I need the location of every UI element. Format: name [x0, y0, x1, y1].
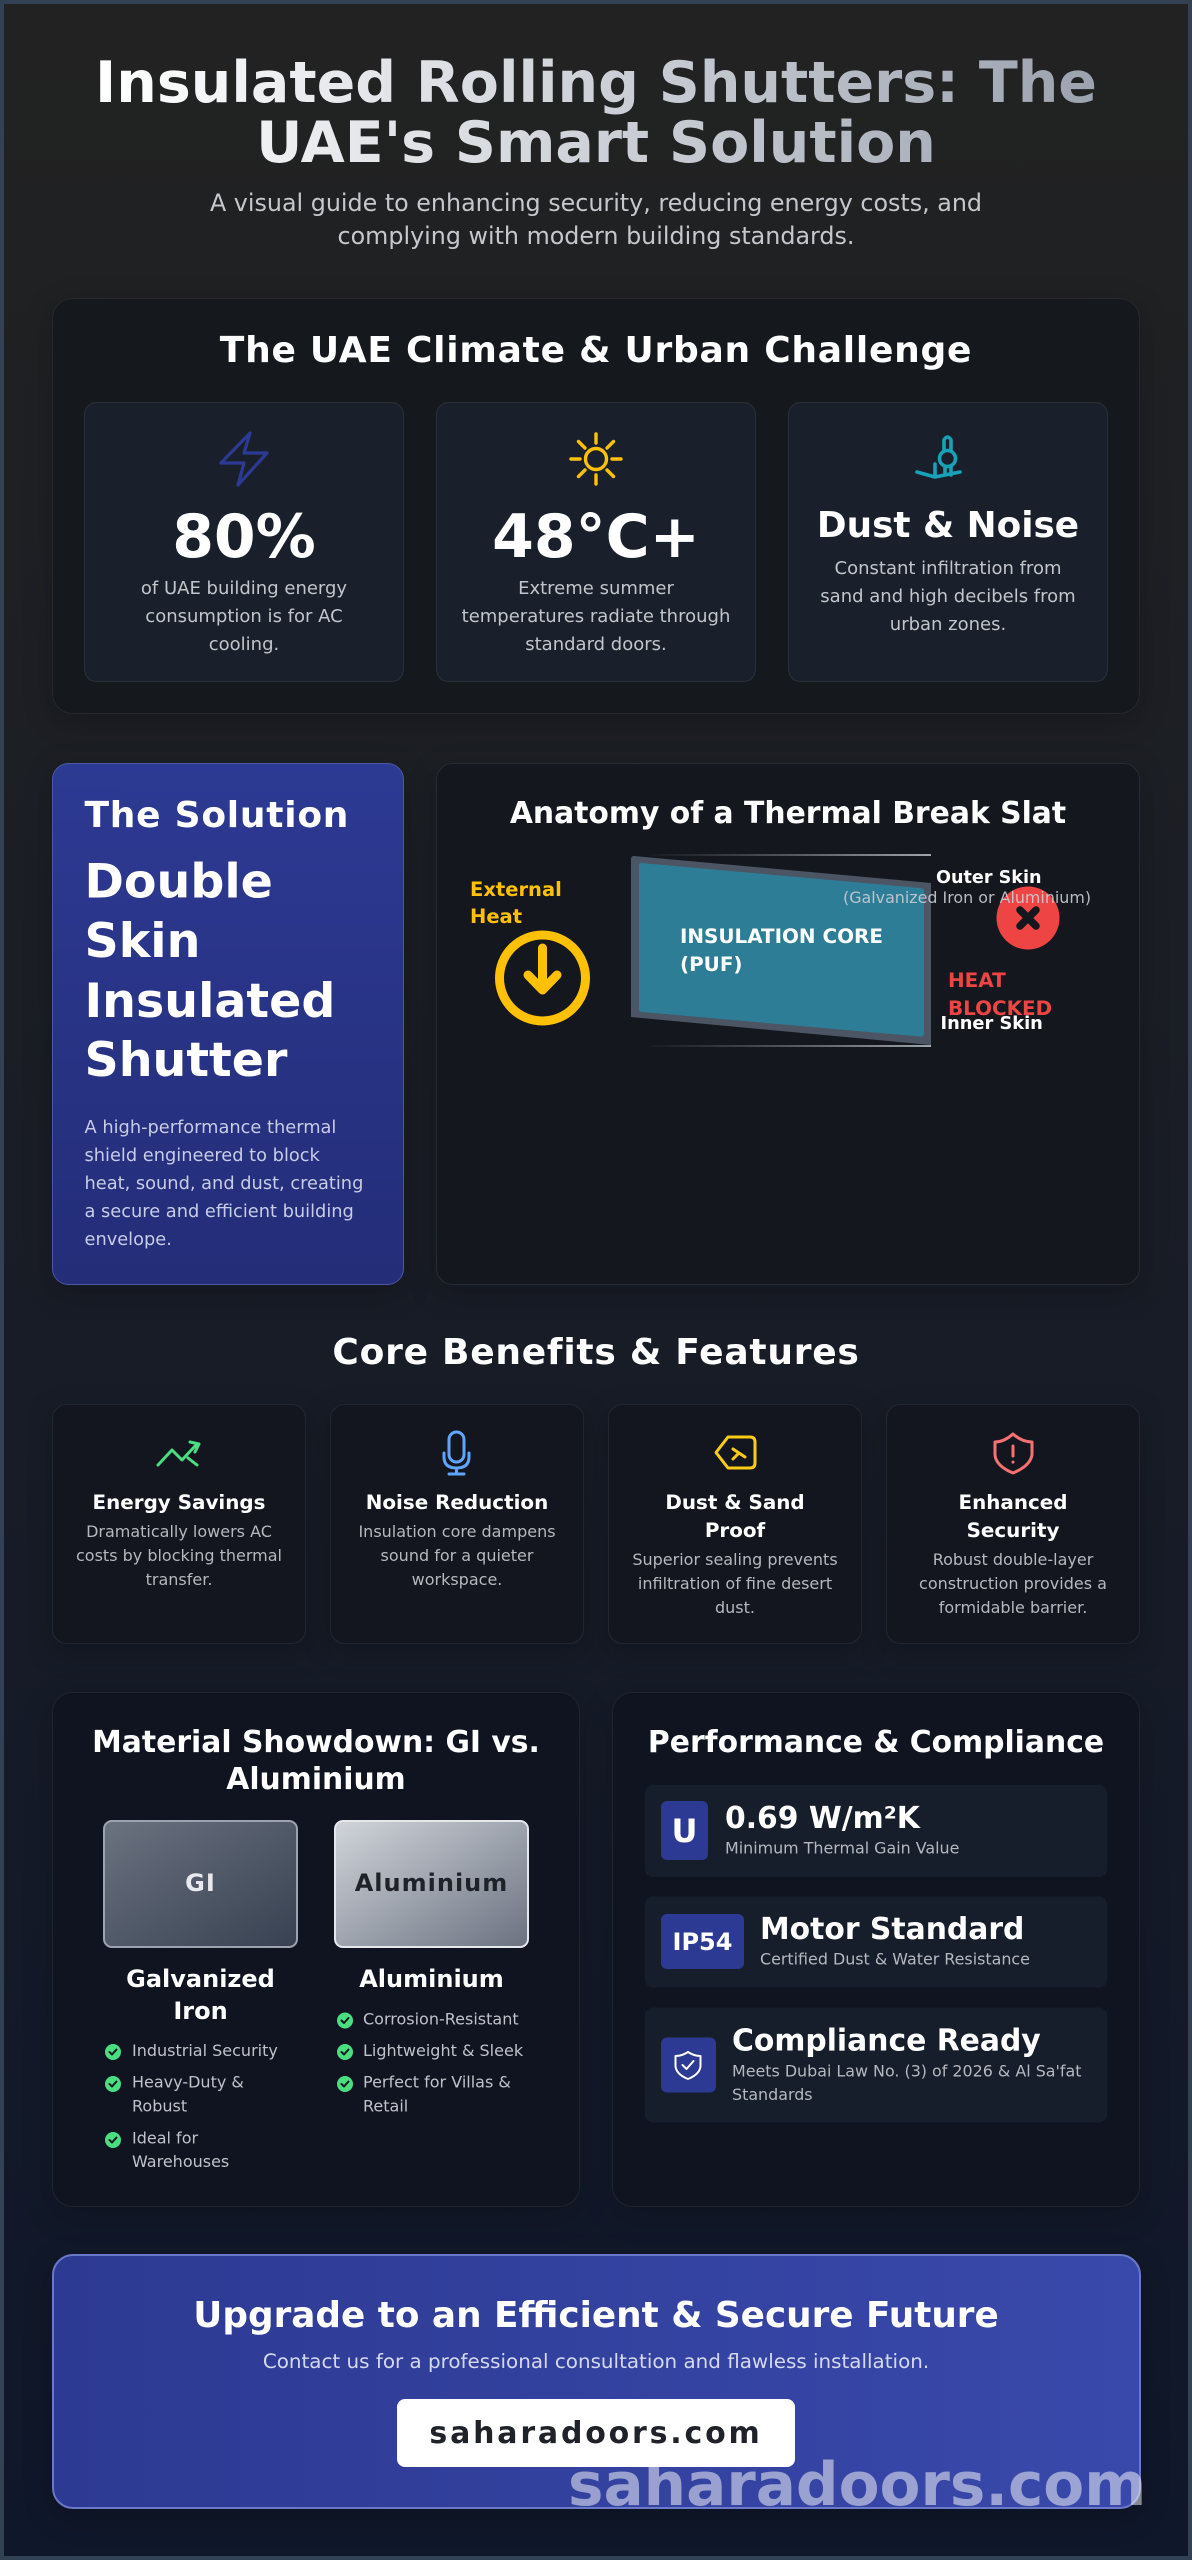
- benefit text: Robust double-layer: [933, 1550, 1094, 1569]
- benefit text: [358, 1522, 556, 1589]
- column: aluminium: Aluminium: [359, 1965, 504, 1993]
- solution name: Skin: [84, 914, 200, 969]
- title: Insulated Rolling Shutters: The: [95, 50, 1097, 116]
- label: external heat: External: [470, 878, 562, 901]
- solution name: Double: [84, 854, 273, 910]
- card: energy stat: [84, 402, 404, 682]
- subheading: call to action: Contact us for a professional consultation and flawless installation.: [263, 2350, 929, 2373]
- solution description: [84, 1117, 363, 1250]
- heading: material showdown: [92, 1725, 540, 1797]
- stat: 80%: 80%: [172, 502, 316, 572]
- benefit title: Dust & Sand: [665, 1491, 805, 1514]
- benefit text: sound for a quieter: [381, 1546, 534, 1565]
- solution description: envelope.: [84, 1229, 172, 1250]
- benefit text: [919, 1550, 1107, 1617]
- swatch: Aluminium: [335, 1821, 528, 1947]
- label: outer skin: Outer Skin: [936, 868, 1042, 888]
- benefit title: Noise Reduction: [366, 1491, 548, 1514]
- checklist: aluminium: Lightweight & Sleek: [363, 2041, 524, 2060]
- row: compliance ready: Compliance Ready: [732, 2024, 1041, 2058]
- icon: microphone: [444, 1432, 469, 1474]
- row: U-value: Minimum Thermal Gain Value: [725, 1838, 959, 1858]
- label: inner skin: Inner Skin: [940, 1013, 1043, 1034]
- description: [141, 578, 347, 655]
- panel: climate challenge: [52, 298, 1140, 714]
- title: [95, 50, 1097, 176]
- heading: material showdown: Material Showdown: GI vs.: [92, 1725, 540, 1760]
- card: noise reduction: [330, 1404, 584, 1644]
- row: motor standard: Motor Standard: [760, 1912, 1024, 1947]
- row: compliance ready: Standards: [732, 2085, 813, 2104]
- checklist: GI: Robust: [132, 2096, 187, 2116]
- solution description: heat, sound, and dust, creating: [84, 1173, 363, 1194]
- description: [820, 558, 1076, 635]
- benefit text: transfer.: [146, 1570, 212, 1589]
- benefit text: Superior sealing prevents: [632, 1550, 838, 1569]
- benefit text: [632, 1550, 838, 1617]
- row: motor standard: Certified Dust & Water Resistance: [760, 1950, 1030, 1968]
- icon: lightning bolt: [221, 433, 267, 485]
- benefit text: construction provides a: [919, 1574, 1107, 1593]
- card: temperature stat: [436, 402, 756, 682]
- benefit title: Energy Savings: [93, 1491, 265, 1514]
- benefit text: costs by blocking thermal: [76, 1546, 282, 1565]
- solution description: A high-performance thermal: [84, 1117, 336, 1138]
- benefit title: Security: [967, 1519, 1059, 1542]
- label: outer skin: (Galvanized Iron or Aluminium): [843, 888, 1091, 907]
- checklist: GI: [105, 2041, 278, 2171]
- swatch: GI: GI: [185, 1869, 216, 1897]
- subtitle: A visual guide to enhancing security, reducing energy costs, and: [210, 189, 982, 217]
- subtitle: complying with modern building standards.: [338, 222, 854, 250]
- title: UAE's Smart Solution: [256, 110, 936, 176]
- benefit title: Enhanced: [958, 1491, 1068, 1514]
- swatch: GI: [104, 1821, 297, 1947]
- column: galvanized iron: Iron: [173, 1997, 228, 2025]
- heading: anatomy: Anatomy of a Thermal Break Slat: [510, 796, 1066, 831]
- column: aluminium: [337, 1965, 524, 2116]
- badge: IP54: [661, 1914, 744, 1969]
- benefit title: [958, 1491, 1068, 1542]
- label: heat blocked: BLOCKED: [948, 997, 1052, 1020]
- benefit title: [665, 1491, 805, 1542]
- icon: shield alert: [995, 1434, 1032, 1473]
- benefit text: workspace.: [412, 1570, 502, 1589]
- benefit text: Dramatically lowers AC: [86, 1522, 272, 1541]
- row: U-value: [645, 1785, 1107, 1877]
- heading: climate challenge: The UAE Climate & Urban Challenge: [220, 330, 972, 371]
- heading: call to action: Upgrade to an Efficient & Secure Future: [193, 2295, 999, 2336]
- checklist: GI: Warehouses: [132, 2152, 229, 2171]
- label: insulation core: (PUF): [680, 953, 742, 976]
- label: heat blocked: HEAT: [948, 969, 1006, 992]
- description: temperatures radiate through: [462, 606, 730, 627]
- card: energy savings: [52, 1404, 306, 1644]
- icon: sun: [571, 434, 621, 484]
- card: enhanced security: [886, 1404, 1140, 1644]
- label: heat blocked: [948, 969, 1052, 1020]
- benefit text: dust.: [715, 1598, 755, 1617]
- label: insulation core: [680, 925, 883, 976]
- benefit title: Proof: [705, 1519, 766, 1542]
- description: consumption is for AC: [145, 606, 343, 627]
- icon: tag: [716, 1437, 755, 1468]
- icon: heat arrow: [500, 935, 586, 1021]
- label: outer skin: [843, 868, 1091, 907]
- button: website: [397, 2399, 795, 2467]
- badge: shield check: [661, 2038, 716, 2092]
- icon: dust and noise: [917, 437, 960, 477]
- description: of UAE building energy: [141, 578, 347, 599]
- checklist: aluminium: Retail: [363, 2096, 408, 2116]
- panel: core benefits: [52, 1404, 1140, 1644]
- panel: call to action: [53, 2255, 1146, 2520]
- checklist: aluminium: Perfect for Villas &: [363, 2072, 511, 2092]
- description: Extreme summer: [518, 578, 675, 599]
- description: standard doors.: [525, 634, 667, 655]
- description: urban zones.: [890, 614, 1006, 635]
- checklist: aluminium: Corrosion-Resistant: [363, 2010, 519, 2028]
- panel: anatomy of a thermal break slat: [436, 764, 1140, 1284]
- card: dust and noise: [788, 402, 1108, 682]
- watermark: saharadoors.com: [568, 2451, 1146, 2520]
- benefit text: infiltration of fine desert: [638, 1574, 832, 1593]
- solution description: shield engineered to block: [84, 1145, 321, 1166]
- label: insulation core: INSULATION CORE: [680, 925, 883, 948]
- heading: core benefits: Core Benefits & Features: [332, 1332, 860, 1373]
- column: galvanized iron: [105, 1965, 278, 2171]
- label: external heat: [470, 878, 562, 928]
- panel: material showdown: [52, 1692, 580, 2206]
- panel: performance and compliance: [612, 1692, 1140, 2206]
- row: U-value: 0.69 W/m²K: [725, 1801, 921, 1836]
- heading: performance: Performance & Compliance: [648, 1725, 1104, 1760]
- checklist: aluminium: [337, 2010, 524, 2116]
- subtitle: [210, 189, 982, 250]
- diagram: slat cross-section: [631, 855, 931, 1046]
- benefit text: Insulation core dampens: [358, 1522, 556, 1541]
- solution description: a secure and efficient building: [84, 1201, 354, 1222]
- solution name: Shutter: [84, 1033, 288, 1088]
- label: external heat: Heat: [470, 905, 522, 928]
- row: compliance ready: [645, 2008, 1107, 2122]
- checklist: GI: Industrial Security: [132, 2041, 278, 2060]
- solution label: The Solution: [84, 795, 349, 836]
- description: sand and high decibels from: [820, 586, 1076, 607]
- stat: Dust & Noise: Dust & Noise: [817, 505, 1079, 546]
- description: Constant infiltration from: [835, 558, 1061, 579]
- heading: material showdown: Aluminium: [226, 1762, 406, 1797]
- benefit text: [76, 1522, 282, 1589]
- stat: 48°C+: 48°C+: [492, 502, 700, 572]
- benefit text: formidable barrier.: [939, 1598, 1087, 1617]
- row: motor standard: [645, 1896, 1107, 1988]
- solution name: [84, 854, 335, 1088]
- icon: blocked: [996, 886, 1060, 950]
- checklist: GI: Heavy-Duty &: [132, 2072, 244, 2092]
- swatch: Aluminium: Aluminium: [355, 1869, 508, 1897]
- badge: U: [661, 1801, 708, 1860]
- checklist: GI: Ideal for: [132, 2128, 198, 2148]
- description: cooling.: [209, 634, 279, 655]
- badge: IP54: IP54: [673, 1928, 732, 1956]
- solution name: Insulated: [84, 974, 335, 1029]
- description: [462, 578, 730, 655]
- badge: U: U: [672, 1812, 697, 1850]
- row: compliance ready: Meets Dubai Law No. (3) of 2026 & Al Sa'fat: [732, 2062, 1081, 2080]
- panel: the solution: [52, 764, 404, 1284]
- icon: trending arrow: [158, 1442, 199, 1465]
- column: galvanized iron: Galvanized: [126, 1965, 275, 1993]
- button: website: saharadoors.com: [429, 2416, 763, 2451]
- card: dust and sand proof: [608, 1404, 862, 1644]
